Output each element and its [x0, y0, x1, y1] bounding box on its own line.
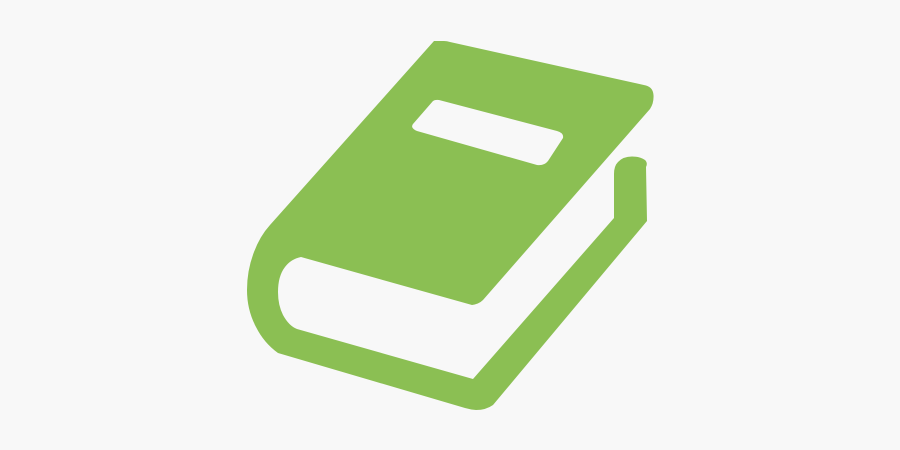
- icon: green book: [247, 41, 654, 410]
